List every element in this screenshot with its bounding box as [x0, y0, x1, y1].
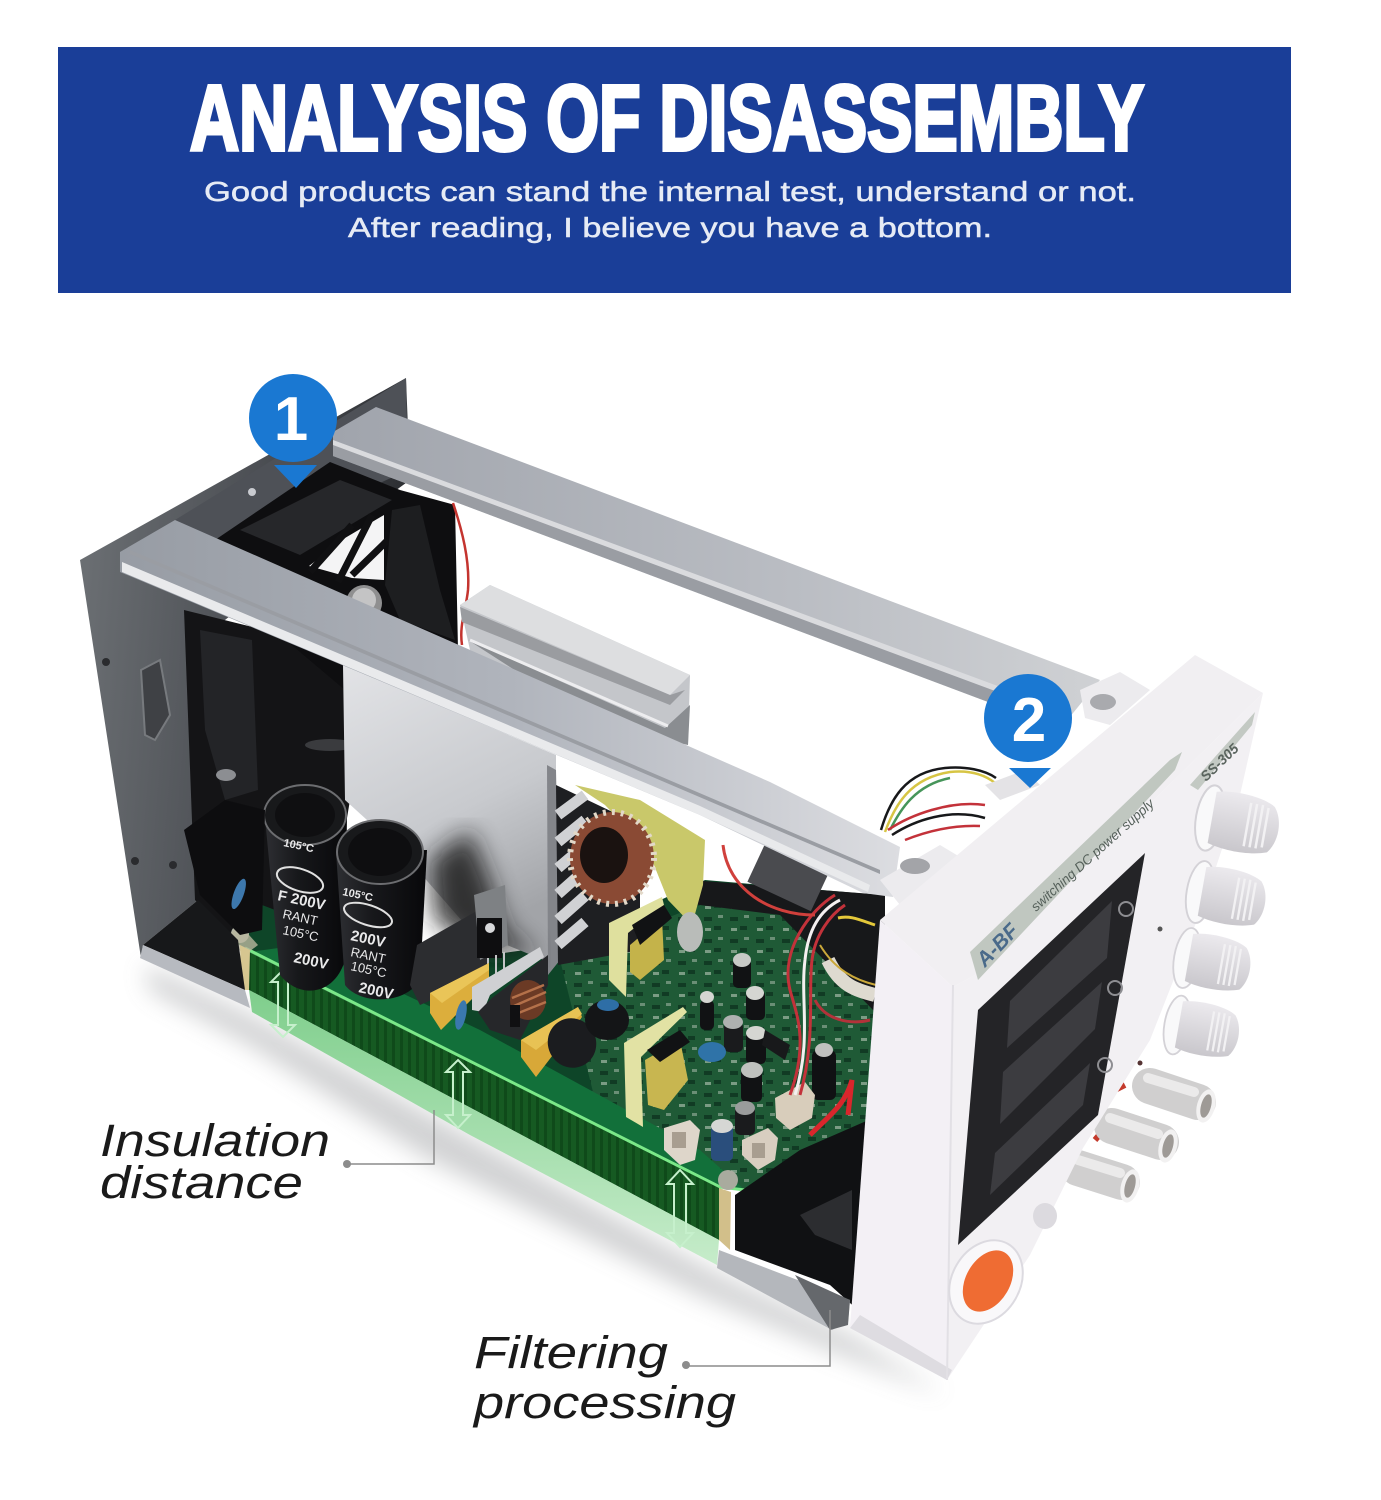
arrow middle [446, 1060, 470, 1128]
subtitle line 1: Good products can stand the internal test, understand or not. [204, 176, 1136, 207]
callout: filtering processing [472, 1310, 830, 1428]
terminal post one [1148, 1078, 1219, 1125]
toroid inductor [570, 785, 705, 925]
capacitor one: 105°C [281, 922, 320, 944]
power inlet block [184, 769, 265, 935]
PCB top [225, 880, 885, 1192]
capacitor one: 200V [292, 949, 330, 973]
bridge rectifier [410, 912, 490, 1005]
brand strip: switching DC power supply [1028, 795, 1158, 914]
capacitor one: RANT [281, 906, 319, 928]
badge 1: 1 [274, 385, 308, 454]
model strip [1190, 712, 1255, 790]
transistor [474, 885, 508, 978]
knob four [1159, 994, 1244, 1065]
knob two [1181, 859, 1270, 934]
panel: header banner [58, 47, 1291, 293]
knob three [1169, 926, 1255, 999]
small button [1033, 1203, 1057, 1229]
round choke [539, 1009, 605, 1077]
badge 1 [249, 374, 337, 488]
component cluster: electrolytic capacitors [264, 785, 427, 1003]
fan opening [309, 515, 384, 580]
red and white wire harness [723, 845, 875, 1135]
arrow left [271, 970, 295, 1037]
callout: filtering processing: Filtering [474, 1327, 668, 1378]
badge 2 [984, 674, 1072, 788]
capacitor two [336, 820, 427, 1003]
wires behind terminals [1095, 1085, 1125, 1140]
rear heat sink [460, 585, 690, 745]
background capacitor and ribbon [747, 844, 876, 995]
badge 2: 2 [1012, 686, 1046, 755]
capacitor two: 200V [357, 979, 395, 1003]
PCB mounting screws [231, 925, 249, 943]
main heat sink [343, 665, 640, 975]
capacitor one: 105°C [282, 837, 315, 855]
power supply illustration [80, 378, 1284, 1380]
capacitor two: 105°C [341, 886, 374, 904]
silver choke [472, 947, 548, 1040]
capacitor one: F 200V [276, 887, 327, 914]
white connectors [664, 1082, 815, 1170]
component cluster: board parts [410, 844, 876, 1170]
IC chip [762, 1030, 790, 1060]
plate cutout [141, 660, 170, 740]
mounting tabs with screws [880, 672, 1150, 905]
display window two [1000, 982, 1102, 1124]
terminal posts [1078, 1078, 1219, 1205]
callout: insulation distance: distance [100, 1157, 303, 1208]
terminal post three [1078, 1160, 1143, 1205]
yellow capacitor two [521, 1007, 582, 1077]
capacitor two: 200V [349, 927, 387, 951]
model strip: SS-305 [1197, 740, 1242, 784]
fan power wire [453, 503, 468, 645]
blue capacitor [453, 999, 469, 1031]
back plate [80, 378, 410, 958]
callout: filtering processing: processing [472, 1377, 736, 1428]
capacitor two: 105°C [349, 958, 388, 980]
brand strip [970, 752, 1182, 980]
chassis floor [140, 900, 880, 1330]
yellow capacitor one [430, 963, 489, 1030]
terminal post two [1110, 1118, 1181, 1165]
capacitor two: RANT [349, 944, 387, 966]
rear aluminum rail [333, 407, 1100, 729]
ground shadow under chassis [145, 965, 945, 1395]
arrow right [667, 1170, 693, 1247]
transformer two [624, 1007, 690, 1127]
display [958, 853, 1145, 1245]
knob one [1190, 783, 1284, 863]
callout: insulation distance: Insulation [100, 1115, 330, 1166]
fan side highlight [200, 630, 258, 800]
display window three [990, 1063, 1090, 1195]
callout: insulation distance [100, 1110, 434, 1208]
insulation band [240, 945, 731, 1265]
power button [935, 1227, 1037, 1337]
capacitor one [264, 785, 347, 991]
small electrolytic capacitors [698, 953, 836, 1161]
fins [556, 785, 640, 965]
display window one [1007, 901, 1112, 1048]
front panel housing [850, 655, 1284, 1380]
subtitle line 2: After reading, I believe you have a bottom. [348, 212, 992, 243]
panel wires behind housing [881, 767, 996, 840]
front aluminum rail [120, 520, 900, 897]
brand strip: A-BF [971, 919, 1024, 972]
transformer one [609, 897, 703, 997]
interior dark area and cooling fan [184, 462, 458, 945]
